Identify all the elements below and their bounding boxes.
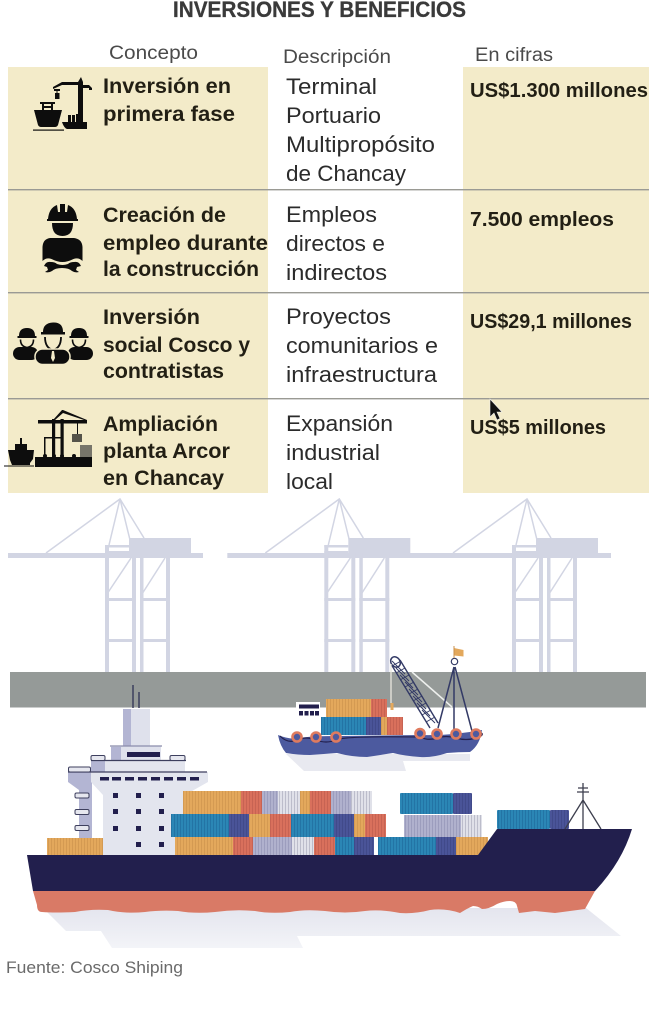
boat hull <box>278 730 482 757</box>
row 1: description: Multipropósito <box>286 132 435 157</box>
hull lower red <box>33 891 595 913</box>
column background: concepto <box>8 67 268 493</box>
row 2: description: indirectos <box>286 260 387 285</box>
railings <box>68 756 185 830</box>
boat mast and flag <box>438 646 472 731</box>
row 3: concept: Inversión <box>103 306 200 329</box>
source note: Fuente: Cosco Shiping <box>6 959 183 977</box>
row 1: description: Portuario <box>286 103 381 128</box>
row 1: concept <box>103 75 235 126</box>
row 3: description: comunitarios e <box>286 333 438 358</box>
illustration: port cranes <box>8 499 611 672</box>
row 2: concept: empleo durante <box>103 232 268 255</box>
row 1: figure: US$1.300 millones <box>470 80 648 102</box>
row 4: figure: US$5 millones <box>470 417 606 439</box>
boat shadow <box>286 754 470 771</box>
row 1: description <box>286 74 435 186</box>
row 2: description: Empleos <box>286 202 377 227</box>
hull navy <box>27 829 632 891</box>
boat cabin <box>296 702 320 720</box>
superstructure <box>68 685 208 855</box>
row 3: concept: social Cosco y <box>103 334 250 357</box>
boat containers <box>321 699 403 735</box>
bridge windows <box>100 777 199 847</box>
row 3: figure: US$29,1 millones <box>470 311 632 333</box>
icon: mouse cursor <box>490 399 502 420</box>
header: Concepto: Concepto <box>109 43 198 64</box>
row 2: description: directos e <box>286 231 385 256</box>
row 3: concept <box>103 306 250 383</box>
header: En cifras: En cifras <box>475 45 553 66</box>
row 4: concept: en Chancay <box>103 467 224 490</box>
row 2: concept <box>103 204 268 281</box>
row 2: figure: 7.500 empleos <box>470 209 614 231</box>
icon: three workers in helmets <box>13 322 93 364</box>
icon: ship and port crane <box>33 77 92 131</box>
row 2: concept: la construcción <box>103 258 259 281</box>
icon: port terminal with crane and ship <box>4 410 92 467</box>
row 1: description: Terminal <box>286 74 377 99</box>
row 1: concept: primera fase <box>103 103 235 126</box>
row 4: concept: Ampliación <box>103 413 218 436</box>
bow mast <box>565 783 601 829</box>
row 1: description: de Chancay <box>286 161 406 186</box>
crane 3 <box>415 499 611 672</box>
ship shadow <box>43 908 621 948</box>
icon: construction worker with wrench <box>42 204 82 272</box>
boat life rings <box>292 729 480 742</box>
left containers <box>47 838 125 856</box>
row 2: concept: Creación de <box>103 204 226 227</box>
illustration: container ship <box>27 685 632 948</box>
illustration: small tugboat <box>278 646 482 771</box>
row 1: concept: Inversión en <box>103 75 231 98</box>
row 4: description: industrial <box>286 440 380 465</box>
crane 1 <box>8 499 203 672</box>
crane 2 <box>227 499 422 672</box>
row 4: concept: planta Arcor <box>103 440 230 463</box>
cargo containers <box>171 791 569 856</box>
row 2: description <box>286 202 387 285</box>
row 3: description <box>286 304 438 387</box>
row 4: description <box>286 411 393 494</box>
row 3: description: Proyectos <box>286 304 391 329</box>
illustration: quay band <box>10 672 646 708</box>
row 3: description: infraestructura <box>286 362 438 387</box>
header: Descripción: Descripción <box>283 47 391 68</box>
panel: investment table <box>4 43 649 494</box>
row 3: concept: contratistas <box>103 360 224 383</box>
row 4: description: Expansión <box>286 411 393 436</box>
row 4: description: local <box>286 469 333 494</box>
row 4: concept <box>103 413 230 490</box>
column background: en cifras <box>463 67 649 493</box>
boat crane arm <box>389 655 452 728</box>
boat rope <box>280 732 482 742</box>
